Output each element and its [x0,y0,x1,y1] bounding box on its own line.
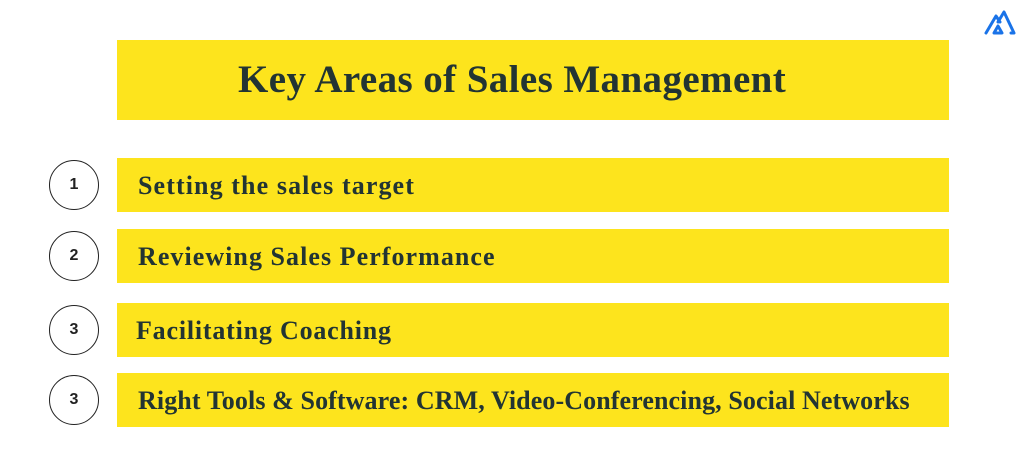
row 2: Reviewing Sales Performance [138,242,496,271]
title: Key Areas of Sales Management [238,58,786,101]
row 1 [117,158,949,212]
row 3 [117,303,949,357]
row 4 [117,373,949,427]
title [117,40,949,120]
circle 4: 3 [70,391,78,408]
circle 2 [49,231,99,281]
row 2 [117,229,949,283]
row 4: Right Tools & Software: CRM, Video-Conferencing, Social Networks [138,386,910,415]
circle 1: 1 [70,176,78,193]
circle 3: 3 [70,321,78,338]
circle 1 [49,160,99,210]
logo icon [984,10,1016,35]
circle 3 [49,305,99,355]
circle 2: 2 [70,247,78,264]
row 1: Setting the sales target [138,171,415,200]
circle 4 [49,375,99,425]
row 3: Facilitating Coaching [136,316,392,345]
